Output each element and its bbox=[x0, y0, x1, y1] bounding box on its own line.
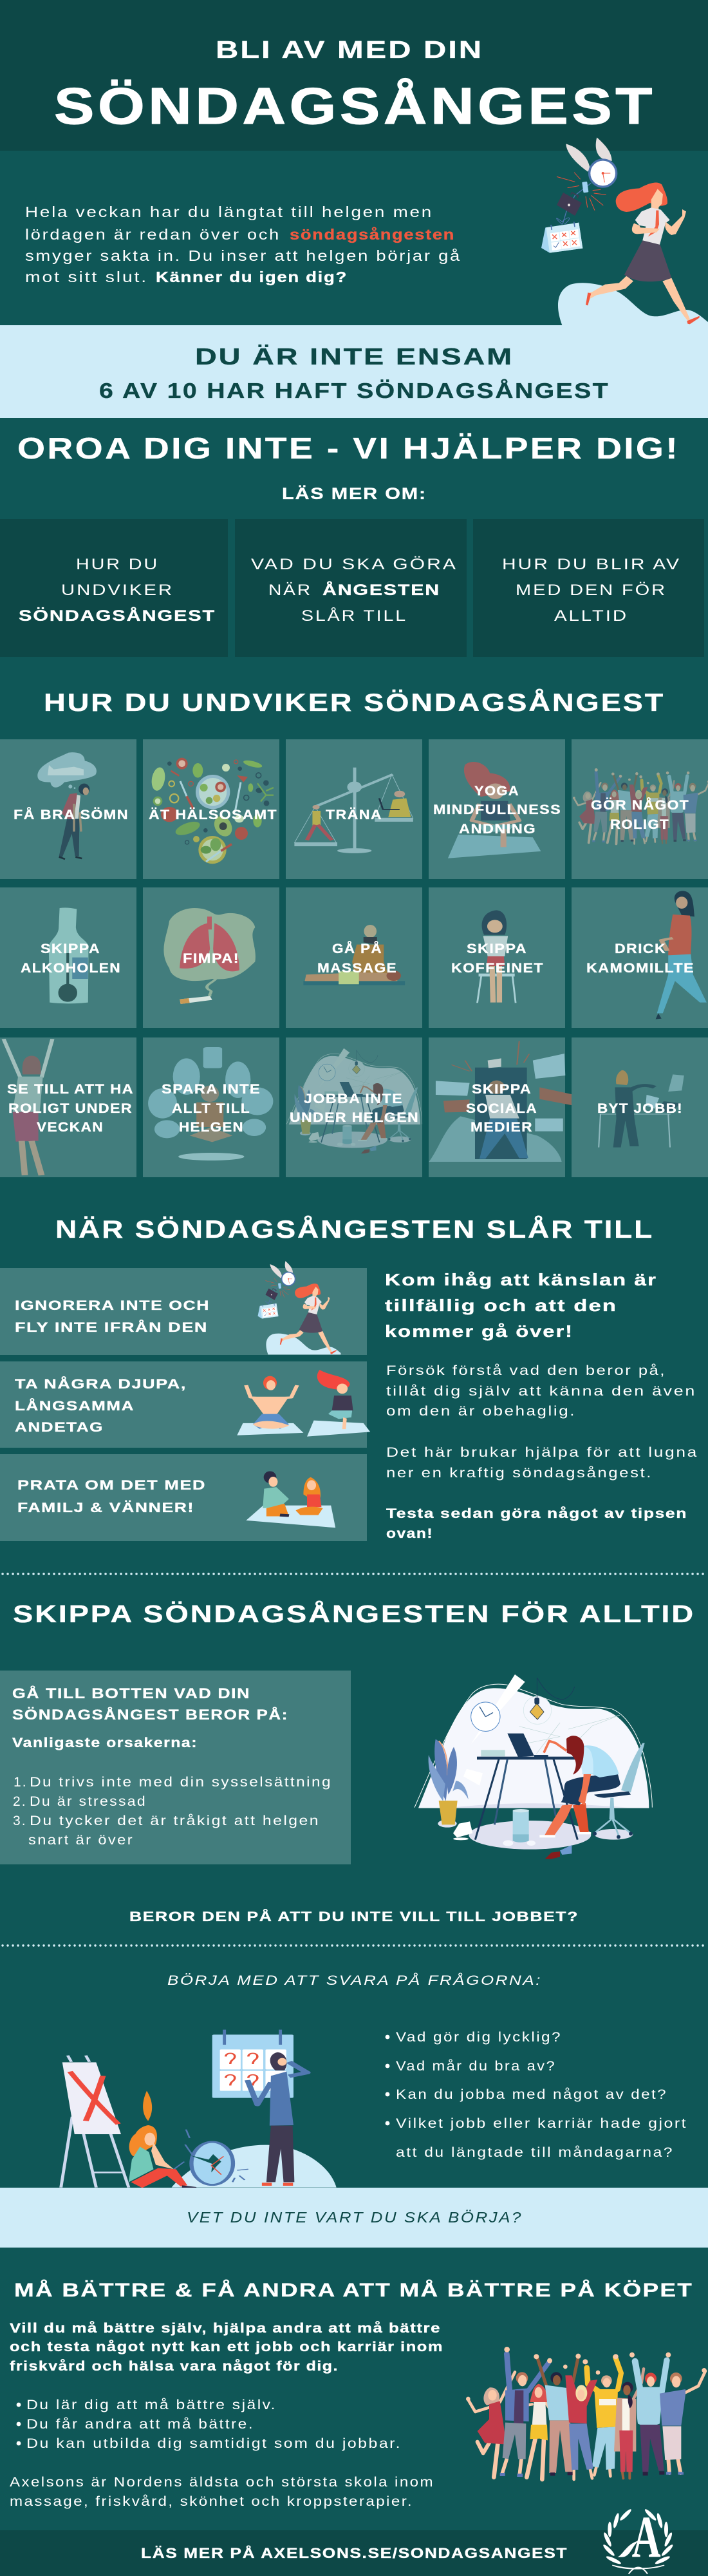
intro text: lördagen är redan över och bbox=[25, 226, 281, 243]
illustration: easel, calendar, confused people bbox=[61, 2030, 337, 2188]
tile: gör något roligt bbox=[572, 739, 708, 879]
heading: skippa söndagsångesten för alltid: SKIPPA SÖNDAGSÅNGESTEN FÖR ALLTID bbox=[13, 1600, 695, 1628]
icon: balance scale bbox=[294, 768, 413, 853]
intro text bbox=[25, 204, 461, 285]
numbered list: 1. bbox=[14, 1775, 28, 1790]
bullet list: benefits bbox=[17, 2398, 402, 2451]
numbered list: 2. bbox=[13, 1794, 27, 1809]
numbered list: Du är stressad bbox=[30, 1794, 147, 1809]
link 1: SÖNDAGSÅNGEST bbox=[19, 607, 216, 625]
numbered list: Du trivs inte med din sysselsättning bbox=[30, 1775, 332, 1790]
icon: confused man bbox=[247, 2052, 307, 2186]
link 1: HUR DU bbox=[76, 556, 159, 573]
tile: träna bbox=[286, 739, 422, 879]
label: KAMOMILLTE bbox=[586, 961, 694, 976]
icon: massage bbox=[303, 925, 405, 985]
subheading: läs mer om: LÄS MER OM: bbox=[282, 485, 427, 503]
tile: spara inte allt till helgen bbox=[143, 1037, 279, 1177]
label: KOFFEINET bbox=[451, 961, 544, 976]
panel: djupa andetag: TA NÅGRA DJUPA, bbox=[15, 1376, 187, 1392]
label bbox=[451, 942, 544, 976]
question: beror den på: BEROR DEN PÅ ATT DU INTE VILL TILL JOBBET? bbox=[129, 1909, 579, 1924]
label: MASSAGE bbox=[317, 961, 397, 976]
panel: djupa andetag: ANDETAG bbox=[15, 1420, 104, 1435]
text: vill du må bättre bbox=[10, 2321, 443, 2374]
panel: gå till botten bbox=[0, 1671, 351, 1864]
tile: byt jobb bbox=[572, 1037, 708, 1177]
label bbox=[290, 1092, 419, 1125]
label: HELGEN bbox=[179, 1120, 244, 1135]
icon: two people meditating bbox=[237, 1370, 370, 1437]
label bbox=[466, 1082, 537, 1135]
link 2 bbox=[251, 556, 458, 625]
text: explanation: ovan! bbox=[386, 1526, 433, 1541]
bulleted questions: Kan du jobba med något av det? bbox=[396, 2087, 667, 2102]
tile: ät hälsosamt bbox=[143, 739, 279, 879]
panel: prata om det bbox=[0, 1454, 367, 1541]
icon: running woman bbox=[257, 1261, 340, 1354]
text: explanation: om den är obehaglig. bbox=[386, 1404, 576, 1419]
illustration: running woman with flying clock bbox=[541, 137, 708, 325]
text: vill du må bättre: Vill du må bättre själv, hjälpa andra att må bättre bbox=[10, 2321, 441, 2336]
panel heading: GÅ TILL BOTTEN VAD DIN bbox=[12, 1685, 250, 1701]
bullet list: benefits: Du kan utbilda dig samtidigt som du jobbar. bbox=[26, 2436, 402, 2451]
person 6 bbox=[594, 2389, 618, 2428]
label bbox=[317, 941, 397, 976]
tile: yoga mindfullness andning bbox=[429, 739, 565, 879]
text: kom ihåg bbox=[385, 1270, 657, 1341]
label: ROLIGT bbox=[610, 817, 669, 832]
label bbox=[433, 784, 561, 837]
logo: axelsons wreath: A bbox=[632, 2504, 661, 2570]
intro text: smyger sakta in. Du inser att helgen börjar gå bbox=[25, 247, 461, 264]
subheading: börja med att svara: BÖRJA MED ATT SVARA PÅ FRÅGORNA: bbox=[167, 1973, 542, 1988]
illustration: stressed woman at desk bbox=[415, 1674, 652, 1859]
intro text: mot sitt slut. bbox=[25, 269, 148, 285]
text: vill du må bättre: och testa något nytt kan ett jobb och karriär inom bbox=[10, 2340, 443, 2354]
label: MEDIER bbox=[470, 1120, 533, 1135]
link 1 bbox=[19, 556, 216, 625]
person 8 bbox=[637, 2387, 663, 2426]
footer band bbox=[0, 2530, 708, 2576]
title line 1: BLI AV MED DIN bbox=[216, 37, 483, 64]
label: SPARA INTE bbox=[162, 1082, 261, 1097]
text: om axelsons: Axelsons är Nordens äldsta och största skola inom bbox=[10, 2475, 434, 2490]
text: vill du må bättre: friskvård och hälsa vara något för dig. bbox=[10, 2359, 339, 2374]
text: om axelsons bbox=[10, 2475, 434, 2509]
intro text: Hela veckan har du längtat till helgen men bbox=[25, 204, 433, 220]
text: explanation: Det här brukar hjälpa för att lugna bbox=[386, 1445, 698, 1460]
panel: prata om det: FAMILJ & VÄNNER! bbox=[17, 1501, 194, 1515]
heading: DU ÄR INTE ENSAM bbox=[195, 343, 514, 370]
label: MINDFULLNESS bbox=[433, 802, 561, 817]
label: UNDER HELGEN bbox=[290, 1110, 419, 1125]
tile: skippa sociala medier bbox=[429, 1037, 574, 1177]
label: ANDNING bbox=[459, 822, 536, 837]
label: SKIPPA bbox=[41, 942, 100, 956]
icon: tired man dreaming of bed bbox=[37, 752, 97, 859]
text: kom ihåg: kommer gå över! bbox=[385, 1321, 573, 1341]
icon: woman cheering bbox=[4, 1039, 52, 1175]
label bbox=[591, 797, 689, 832]
person 9 bbox=[660, 2389, 685, 2426]
label: YOGA bbox=[474, 784, 519, 799]
bulleted questions bbox=[386, 2030, 687, 2160]
label: SKIPPA bbox=[467, 942, 527, 956]
icon: sitting woman with flame bbox=[129, 2091, 196, 2188]
tile: gå på massage bbox=[286, 887, 422, 1028]
link 2: ÅNGESTEN bbox=[322, 581, 440, 599]
icon: person in door with notifications bbox=[429, 1041, 574, 1162]
label bbox=[21, 942, 121, 976]
icon: woman walking with mug bbox=[656, 891, 707, 1019]
label: ALKOHOLEN bbox=[21, 961, 121, 976]
panel heading bbox=[12, 1685, 288, 1723]
text: explanation: tillåt dig själv att känna den även bbox=[386, 1384, 696, 1399]
bulleted questions: att du längtade till måndagarna? bbox=[396, 2145, 674, 2160]
panel: du är inte ensam bbox=[0, 325, 708, 418]
numbered list: Du tycker det är tråkigt att helgen bbox=[30, 1814, 320, 1828]
link 2: SLÅR TILL bbox=[301, 607, 407, 625]
person 1 bbox=[483, 2387, 499, 2405]
panel: djupa andetag: LÅNGSAMMA bbox=[15, 1398, 135, 1414]
icon: bottle with ball and chain bbox=[49, 907, 88, 1003]
icon: lungs and cigarette bbox=[163, 908, 256, 1004]
tile: se till att ha roligt bbox=[0, 1037, 136, 1177]
text: om axelsons: massage, friskvård, skönhet och kroppsterapier. bbox=[10, 2494, 413, 2509]
statistic: 6 AV 10 HAR HAFT SÖNDAGSÅNGEST bbox=[99, 379, 610, 402]
label: ROLIGT UNDER bbox=[8, 1101, 133, 1116]
icon: stressed woman at desk, faded bbox=[286, 1048, 422, 1153]
intro text: Känner du igen dig? bbox=[156, 269, 348, 285]
heading: när söndagsångesten slår till: NÄR SÖNDAGSÅNGESTEN SLÅR TILL bbox=[55, 1215, 654, 1244]
icon: two people talking on mat bbox=[246, 1471, 335, 1528]
label: FIMPA! bbox=[183, 951, 239, 966]
text: kom ihåg: Kom ihåg att känslan är bbox=[385, 1270, 657, 1289]
subheading: Vanligaste orsakerna: bbox=[12, 1736, 198, 1750]
tile: få bra sömn bbox=[0, 739, 136, 879]
heading: må bättre: MÅ BÄTTRE & FÅ ANDRA ATT MÅ BÄTTRE PÅ KÖPET bbox=[14, 2280, 693, 2301]
panel: ignorera inte: FLY INTE IFRÅN DEN bbox=[15, 1320, 208, 1335]
panel: vet du inte vart: VET DU INTE VART DU SKA BÖRJA? bbox=[187, 2209, 523, 2226]
link 2: VAD DU SKA GÖRA bbox=[251, 556, 458, 573]
label: ALLT TILL bbox=[172, 1101, 250, 1116]
panel: vet du inte vart bbox=[0, 2188, 708, 2248]
link 3: ALLTID bbox=[554, 607, 628, 625]
logo: axelsons wreath bbox=[602, 2504, 674, 2574]
bullet list: benefits: Du får andra att må bättre. bbox=[26, 2417, 254, 2432]
header band bbox=[0, 0, 708, 151]
text: explanation: Testa sedan göra något av tipsen bbox=[386, 1506, 687, 1521]
icon: hill bbox=[172, 2145, 337, 2188]
link 2: NÄR bbox=[268, 582, 312, 599]
icon: broken clock bbox=[172, 2130, 248, 2185]
link 1: UNDVIKER bbox=[61, 582, 174, 599]
panel: prata om det: PRATA OM DET MED bbox=[17, 1478, 206, 1493]
label: ÄT HÄLSOSAMT bbox=[149, 808, 277, 822]
icon: crowd bbox=[573, 768, 708, 844]
main title: SÖNDAGSÅNGEST bbox=[54, 77, 656, 135]
label: BYT JOBB! bbox=[597, 1101, 683, 1116]
link 3 bbox=[502, 556, 681, 625]
label: TRÄNA bbox=[326, 808, 382, 822]
icon: meditating person with thought bubbles bbox=[148, 1047, 273, 1160]
numbered list bbox=[13, 1775, 332, 1848]
person 7 bbox=[614, 2398, 636, 2452]
text: kom ihåg: tillfällig och att den bbox=[385, 1296, 617, 1315]
illustration: happy crowd bbox=[466, 2347, 707, 2479]
text: explanation: ner en kraftig söndagsångest. bbox=[386, 1466, 653, 1481]
heading: oroa dig inte: OROA DIG INTE - VI HJÄLPER DIG! bbox=[17, 431, 680, 465]
label: VECKAN bbox=[37, 1120, 104, 1135]
label: DRICK bbox=[615, 942, 666, 956]
tile: jobba inte under helgen bbox=[286, 1037, 422, 1177]
text: explanation: Försök förstå vad den beror på, bbox=[386, 1363, 666, 1378]
label: JOBBA INTE bbox=[304, 1092, 403, 1106]
panel: djupa andetag bbox=[0, 1361, 370, 1448]
label: FÅ BRA SÖMN bbox=[14, 807, 129, 822]
call to action: LÄS MER PÅ AXELSONS.SE/SONDAGSANGEST bbox=[141, 2544, 568, 2561]
bulleted questions: Vilket jobb eller karriär hade gjort bbox=[396, 2116, 687, 2131]
panel heading: SÖNDAGSÅNGEST BEROR PÅ: bbox=[12, 1706, 288, 1723]
label: SE TILL ATT HA bbox=[7, 1082, 134, 1097]
panel: ignorera inte bbox=[0, 1261, 367, 1355]
person 3 bbox=[530, 2384, 547, 2402]
icon: man throwing papers bbox=[599, 1070, 684, 1148]
link 3: MED DEN FÖR bbox=[516, 582, 667, 599]
panel: ignorera inte: IGNORERA INTE OCH bbox=[15, 1298, 210, 1313]
numbered list: 3. bbox=[13, 1814, 27, 1828]
link 3: HUR DU BLIR AV bbox=[502, 556, 681, 573]
icon: easel with red cross bbox=[61, 2056, 129, 2188]
label: SOCIALA bbox=[466, 1101, 537, 1116]
icon: woman doing yoga bbox=[448, 762, 541, 858]
intro text: söndagsångesten bbox=[290, 226, 455, 243]
bulleted questions: Vad mår du bra av? bbox=[396, 2059, 556, 2074]
tile: skippa koffeinet bbox=[429, 887, 565, 1028]
heading: hur du undviker: HUR DU UNDVIKER SÖNDAGSÅNGEST bbox=[44, 688, 665, 717]
tile: fimpa bbox=[143, 887, 279, 1028]
label bbox=[586, 942, 694, 976]
tile: skippa alkoholen bbox=[0, 887, 136, 1028]
bulleted questions: Vad gör dig lycklig? bbox=[396, 2030, 562, 2045]
numbered list: snart är över bbox=[28, 1833, 134, 1848]
icon: calendar with question marks bbox=[212, 2030, 293, 2098]
label: GÅ PÅ bbox=[332, 941, 382, 956]
icon: woman on stool bbox=[477, 910, 516, 1003]
text: explanation bbox=[386, 1363, 698, 1541]
person 4 bbox=[545, 2385, 570, 2420]
icon: heart of healthy food bbox=[150, 758, 274, 864]
tile: drick kamomillte bbox=[572, 887, 708, 1028]
person 5 bbox=[565, 2375, 597, 2423]
bullet list: benefits: Du lär dig att må bättre själv. bbox=[26, 2398, 277, 2412]
label bbox=[162, 1082, 261, 1135]
label: GÖR NÅGOT bbox=[591, 797, 689, 813]
panel: read-more links bbox=[0, 519, 704, 657]
label bbox=[7, 1082, 134, 1135]
label: SKIPPA bbox=[472, 1082, 532, 1097]
